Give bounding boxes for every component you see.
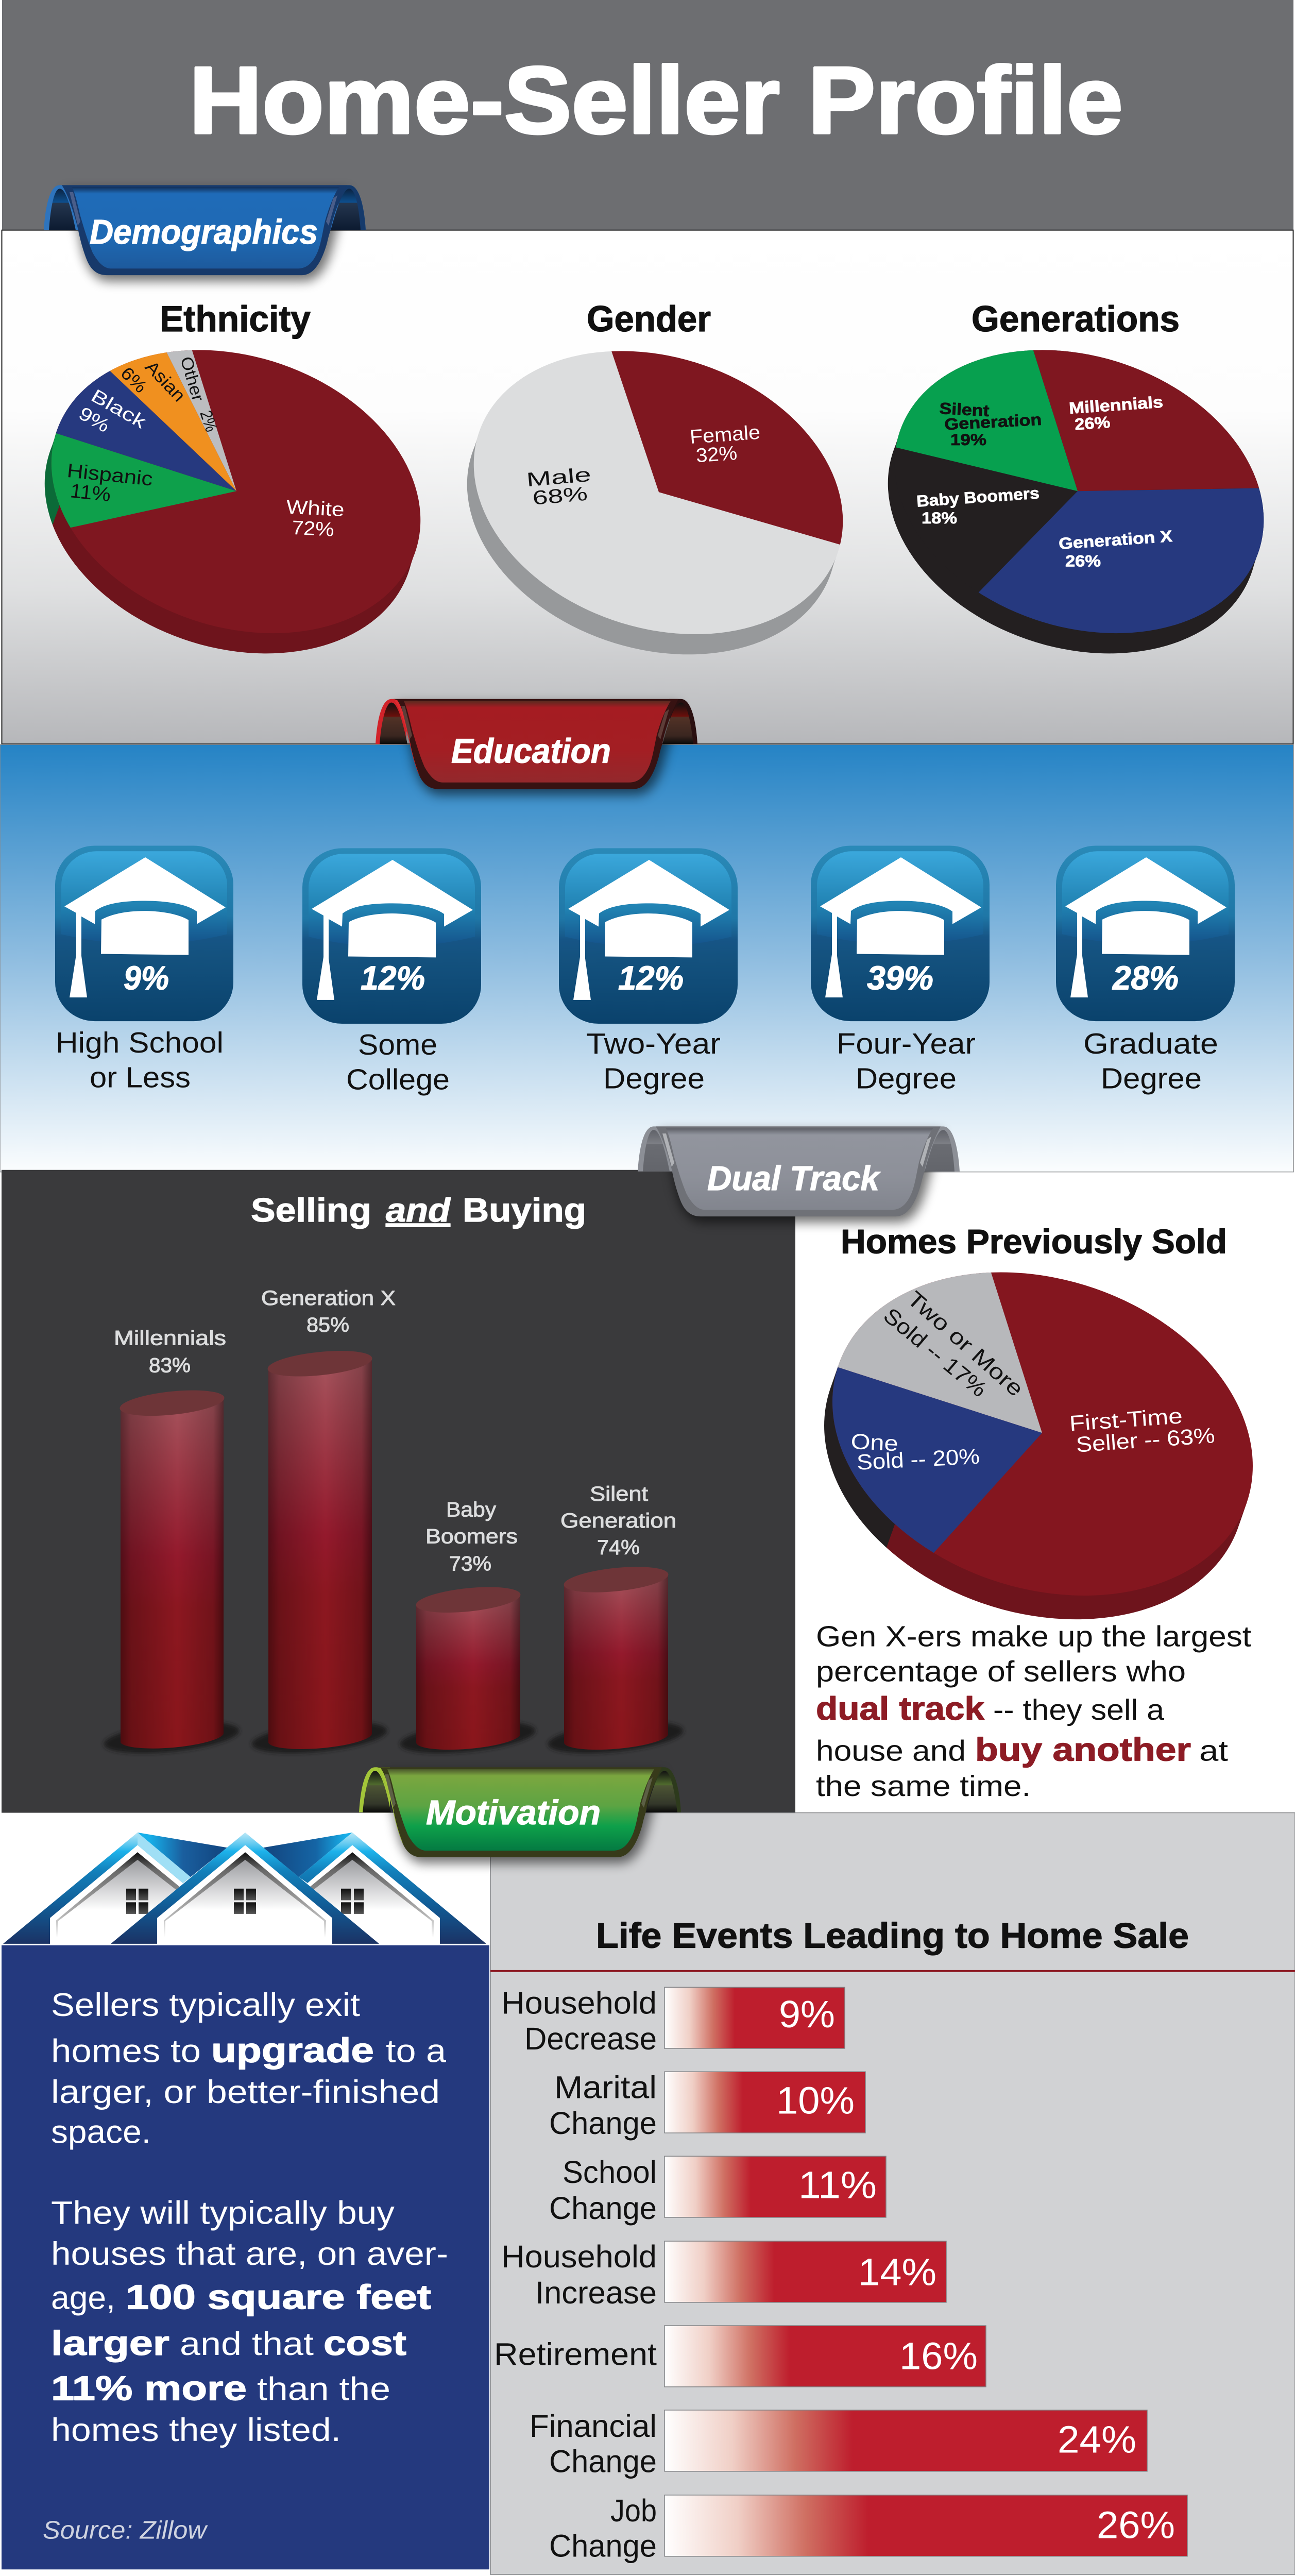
- panel: homes previously sold background: [795, 1173, 1295, 1813]
- education item: four-year degree: Degree: [856, 1062, 957, 1095]
- heading: selling and buying: Buying: [463, 1191, 586, 1229]
- bar chart: life events: [494, 1986, 1187, 2564]
- pie chart: ethnicity: 9%: [75, 403, 113, 436]
- text block: motivation explanation: [51, 1988, 448, 2448]
- ribbon: dual track: [638, 1126, 960, 1223]
- text block: dual track explanation: the same time.: [816, 1770, 1031, 1803]
- text block: dual track explanation: [816, 1620, 1251, 1803]
- ribbon: demographics: [44, 185, 366, 281]
- text block: motivation explanation: space.: [51, 2114, 151, 2150]
- bar: marital change 10%: Marital: [554, 2070, 657, 2105]
- bar: marital change 10%: 10%: [776, 2079, 855, 2122]
- text block: dual track explanation: -- they sell a: [993, 1693, 1164, 1726]
- ribbon: demographics: Demographics: [90, 213, 318, 251]
- heading: selling and buying: Selling: [251, 1191, 371, 1229]
- pie chart: ethnicity: 11%: [69, 480, 112, 506]
- title: Home-Seller Profile: [189, 47, 1123, 154]
- icon: graduation cap 9%: [55, 845, 233, 1021]
- education item: some college: 12%: [361, 959, 425, 996]
- text block: dual track explanation: buy another: [975, 1732, 1191, 1768]
- bar: household increase 14%: 14%: [858, 2250, 936, 2293]
- section: ethnicity: [44, 304, 420, 653]
- icon: graduation cap 12%: [559, 848, 738, 1024]
- text block: dual track explanation: dual track: [816, 1691, 985, 1727]
- bar: household decrease 9%: 9%: [779, 1992, 835, 2036]
- pie chart: ethnicity: White: [286, 496, 345, 521]
- pie chart: generations: 26%: [1065, 552, 1101, 570]
- ribbon: motivation: Motivation: [426, 1794, 601, 1832]
- pie chart: generations: Generation X: [1058, 527, 1173, 553]
- education item: two-year degree: Degree: [603, 1062, 705, 1095]
- pie chart: generations: 26%: [1074, 413, 1111, 433]
- bar: millennials 83%: 83%: [149, 1353, 191, 1377]
- bar: marital change 10%: [549, 2070, 865, 2141]
- bar: school change 11%: School: [563, 2155, 657, 2190]
- text block: motivation explanation: 100 square feet: [126, 2278, 431, 2317]
- text block: dual track explanation: at: [1199, 1735, 1228, 1767]
- text block: motivation explanation: to a: [386, 2033, 447, 2069]
- text block: motivation explanation: Sellers typically exit: [51, 1988, 360, 2023]
- bar: millennials 83%: Millennials: [114, 1326, 226, 1349]
- pie chart: generations: Baby Boomers: [916, 484, 1040, 511]
- bar: generation x 85%: [250, 1286, 396, 1758]
- bar: household increase 14%: Household: [501, 2240, 657, 2275]
- pie chart: homes previously sold: One: [850, 1429, 899, 1456]
- pie chart: ethnicity: Black: [88, 385, 150, 433]
- bar: silent generation 74%: 74%: [597, 1535, 640, 1559]
- bar: baby boomers 73%: [399, 1498, 537, 1758]
- education item: some college: [302, 848, 481, 1096]
- text block: motivation explanation: larger, or better-finished: [51, 2075, 440, 2110]
- education item: high school or less: 9%: [124, 959, 169, 996]
- pie chart: homes previously sold: Seller -- 63%: [1075, 1423, 1216, 1457]
- bar: millennials 83%: [103, 1326, 241, 1758]
- bar: baby boomers 73%: 73%: [449, 1552, 491, 1575]
- ribbon: education: Education: [451, 732, 611, 770]
- education item: two-year degree: Two-Year: [586, 1027, 721, 1060]
- bar: generation x 85%: 85%: [306, 1313, 349, 1336]
- pie chart: ethnicity: Hispanic: [66, 460, 154, 490]
- education item: high school or less: or Less: [90, 1061, 191, 1094]
- text block: dual track explanation: percentage of sellers who: [816, 1655, 1186, 1688]
- icon: graduation cap 28%: [1056, 845, 1235, 1021]
- bar: job change 26%: Job: [610, 2493, 657, 2529]
- pie chart: homes previously sold: First-Time: [1068, 1404, 1183, 1436]
- bar: household increase 14%: Increase: [535, 2275, 657, 2311]
- education item: some college: Some: [358, 1028, 437, 1061]
- education item: four-year degree: [811, 845, 990, 1095]
- text block: motivation explanation: They will typically buy: [51, 2195, 395, 2231]
- bar: baby boomers 73%: Baby: [446, 1498, 497, 1521]
- bar: job change 26%: [549, 2493, 1187, 2564]
- text block: dual track explanation: Gen X-ers make up the largest: [816, 1620, 1251, 1653]
- text block: motivation explanation: homes they listed.: [51, 2412, 341, 2448]
- text block: motivation explanation: cost: [323, 2325, 406, 2363]
- bar: job change 26%: 26%: [1097, 2503, 1175, 2546]
- heading: ethnicity: Ethnicity: [160, 299, 311, 340]
- pie chart: gender: 68%: [532, 483, 588, 510]
- education item: high school or less: [55, 845, 233, 1094]
- education item: graduate degree: Graduate: [1083, 1027, 1218, 1060]
- text block: dual track explanation: house and: [816, 1735, 966, 1767]
- bar: silent generation 74%: Silent: [590, 1482, 648, 1505]
- bar: silent generation 74%: [547, 1482, 685, 1758]
- bar: generation x 85%: Generation X: [261, 1286, 396, 1310]
- bar: school change 11%: Change: [549, 2191, 657, 2226]
- text block: motivation explanation: houses that are, on aver-: [51, 2236, 448, 2272]
- panel: life events background: [490, 1813, 1295, 2574]
- bar: household decrease 9%: Household: [501, 1986, 657, 2021]
- pie chart: homes previously sold: Sold -- 17%: [879, 1303, 992, 1402]
- pie chart: generations: [888, 350, 1264, 653]
- panel: motivation text background: [2, 1945, 489, 2569]
- pie chart: ethnicity: 72%: [292, 517, 335, 541]
- bar chart: selling and buying by generation: [103, 1286, 685, 1758]
- pie chart: generations: Millennials: [1068, 393, 1164, 417]
- text block: motivation explanation: 11% more: [51, 2369, 247, 2408]
- education item: high school or less: High School: [56, 1026, 224, 1059]
- text block: motivation explanation: upgrade: [211, 2031, 374, 2070]
- pie chart: generations: Generation: [944, 410, 1042, 433]
- education item: some college: College: [346, 1063, 450, 1096]
- bar: household decrease 9%: [501, 1986, 845, 2057]
- pie chart: homes previously sold: Two or More: [902, 1286, 1028, 1401]
- source note: Source: Zillow: [43, 2516, 208, 2544]
- panel: education background: [0, 744, 1293, 1172]
- pie chart: generations: Silent: [939, 399, 990, 420]
- bar: financial change 24%: [530, 2409, 1147, 2480]
- bar: job change 26%: Change: [549, 2529, 657, 2564]
- ribbon: dual track: Dual Track: [707, 1160, 881, 1198]
- bar: financial change 24%: Change: [549, 2444, 657, 2480]
- heading: life events: Life Events Leading to Home Sale: [596, 1916, 1189, 1956]
- heading: gender: Gender: [587, 299, 711, 340]
- education item: four-year degree: Four-Year: [837, 1027, 976, 1060]
- header banner: [2, 0, 1293, 230]
- text block: motivation explanation: homes to: [51, 2033, 201, 2069]
- icon: graduation cap 12%: [302, 848, 481, 1024]
- education item: graduate degree: Degree: [1101, 1062, 1202, 1095]
- text block: motivation explanation: than the: [257, 2371, 390, 2407]
- pie chart: gender: Female: [689, 421, 761, 448]
- bar: silent generation 74%: Generation: [560, 1509, 676, 1532]
- text block: motivation explanation: larger: [51, 2325, 169, 2363]
- bar: financial change 24%: Financial: [530, 2409, 657, 2444]
- bar: retirement 16%: Retirement: [494, 2337, 657, 2372]
- pie chart: generations: 18%: [922, 509, 957, 527]
- panel: demographics background: [2, 230, 1293, 744]
- text block: motivation explanation: age,: [51, 2280, 115, 2316]
- education item: graduate degree: 28%: [1112, 959, 1179, 996]
- education item: two-year degree: [559, 848, 738, 1095]
- bar: school change 11%: [549, 2155, 886, 2226]
- pie chart: homes previously sold: Sold -- 20%: [856, 1444, 980, 1475]
- heading: homes previously sold: Homes Previously Sold: [841, 1223, 1227, 1261]
- pie chart: ethnicity: Other: [177, 354, 208, 403]
- pie chart: ethnicity: [44, 350, 420, 653]
- bar: household increase 14%: [501, 2240, 946, 2311]
- icon: graduation cap 39%: [811, 845, 990, 1021]
- pie chart: gender: Male: [525, 464, 592, 491]
- pie chart: ethnicity: Asian: [141, 357, 189, 405]
- bar: marital change 10%: Change: [549, 2106, 657, 2141]
- bar: household decrease 9%: Decrease: [524, 2022, 657, 2057]
- pie chart: gender: 32%: [695, 442, 738, 467]
- bar: baby boomers 73%: Boomers: [425, 1524, 518, 1548]
- ribbon: education: [376, 699, 697, 795]
- pie chart: generations: 19%: [950, 430, 986, 449]
- section: generations: [888, 304, 1264, 653]
- heading: generations: Generations: [972, 299, 1180, 340]
- section: gender: [467, 304, 843, 654]
- bar: retirement 16%: [494, 2326, 986, 2387]
- heading: selling and buying: and: [386, 1191, 451, 1229]
- education item: two-year degree: 12%: [618, 959, 684, 996]
- pie chart: ethnicity: 2%: [196, 408, 221, 434]
- education item: graduate degree: [1056, 845, 1235, 1095]
- pie chart: gender: [467, 351, 843, 654]
- pie chart: ethnicity: 6%: [116, 363, 150, 397]
- bar: school change 11%: 11%: [798, 2163, 877, 2206]
- bar: financial change 24%: 24%: [1058, 2418, 1136, 2461]
- illustration: row of houses: [3, 1833, 486, 1944]
- ribbon: motivation: [359, 1767, 681, 1863]
- panel: selling and buying background: [2, 1170, 795, 1813]
- bar: retirement 16%: 16%: [899, 2334, 978, 2377]
- text block: motivation explanation: and that: [180, 2326, 314, 2362]
- education item: four-year degree: 39%: [867, 959, 933, 996]
- pie chart: homes previously sold: [824, 1273, 1253, 1620]
- heading: selling and buying: [251, 1191, 586, 1229]
